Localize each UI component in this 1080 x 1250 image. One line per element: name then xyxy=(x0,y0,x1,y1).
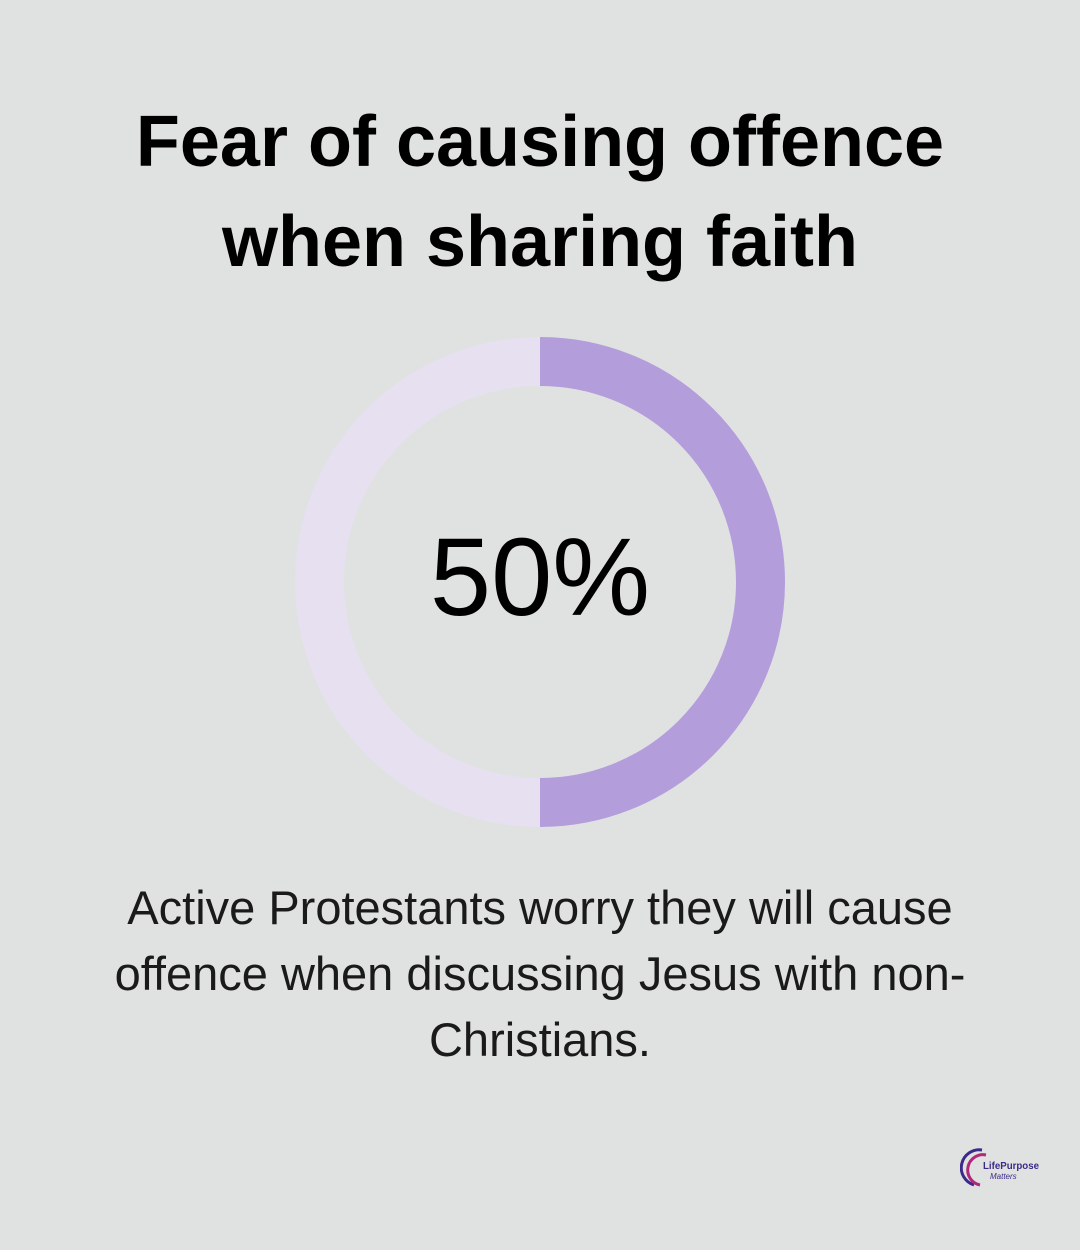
description text: Christians. xyxy=(429,1013,651,1066)
logo xyxy=(960,1148,1039,1186)
description text xyxy=(115,881,965,1066)
logo: Matters xyxy=(990,1172,1017,1181)
title: Fear of causing offence xyxy=(136,102,944,182)
donut chart: 50% xyxy=(430,516,650,639)
title xyxy=(136,102,944,282)
logo: LifePurpose xyxy=(983,1161,1039,1172)
description text: offence when discussing Jesus with non- xyxy=(115,947,965,1000)
description text: Active Protestants worry they will cause xyxy=(127,881,953,934)
title: when sharing faith xyxy=(222,202,858,282)
